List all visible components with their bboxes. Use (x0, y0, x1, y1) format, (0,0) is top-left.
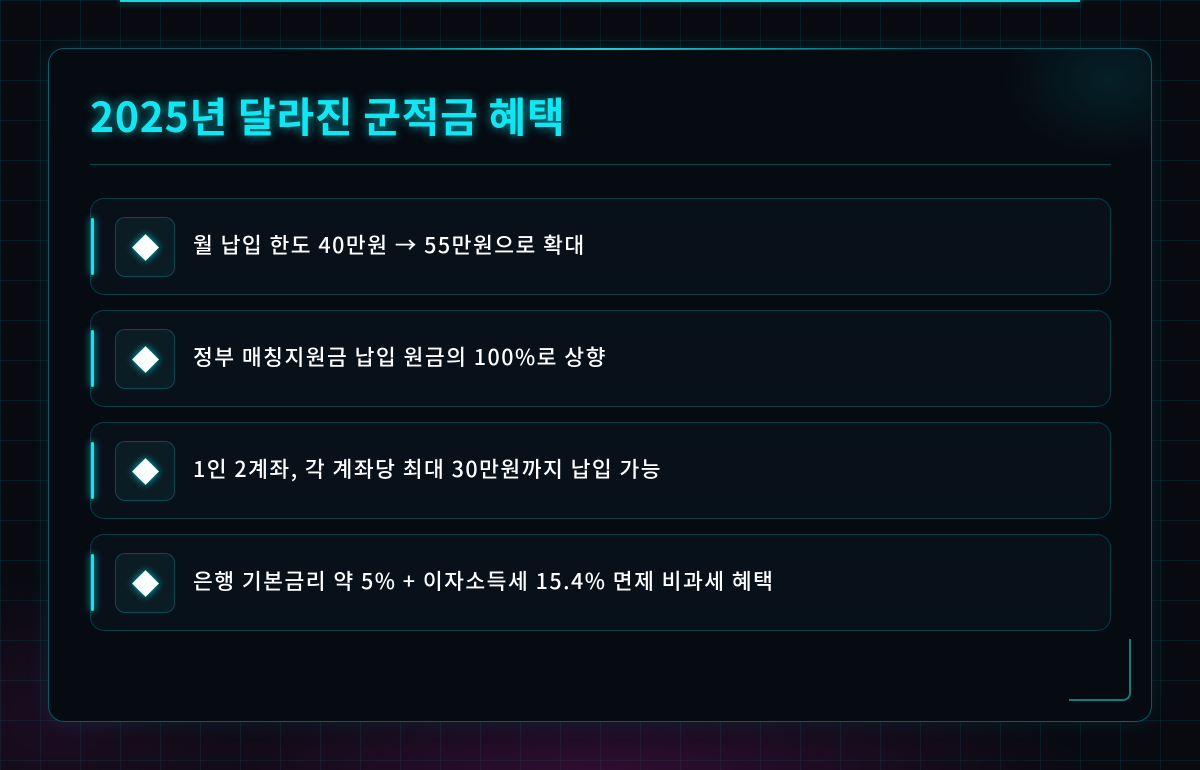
item 1 (90, 198, 1111, 295)
text 3: 1인 2계좌, 각 계좌당 최대 30만원까지 납입 가능 (193, 453, 662, 484)
item 3 (90, 422, 1111, 519)
icon: diamond (115, 217, 175, 277)
item 4 (90, 534, 1111, 631)
text 4: 은행 기본금리 약 5% + 이자소득세 15.4% 면제 비과세 혜택 (193, 565, 774, 596)
icon: diamond (115, 553, 175, 613)
text 2: 정부 매칭지원금 납입 원금의 100%로 상향 (193, 341, 607, 372)
text 1: 월 납입 한도 40만원 → 55만원으로 확대 (193, 229, 586, 260)
item 2 (90, 310, 1111, 407)
icon: diamond (115, 441, 175, 501)
title: 2025년 달라진 군적금 혜택 (90, 84, 565, 144)
corner bracket (1069, 639, 1131, 701)
icon: diamond (115, 329, 175, 389)
